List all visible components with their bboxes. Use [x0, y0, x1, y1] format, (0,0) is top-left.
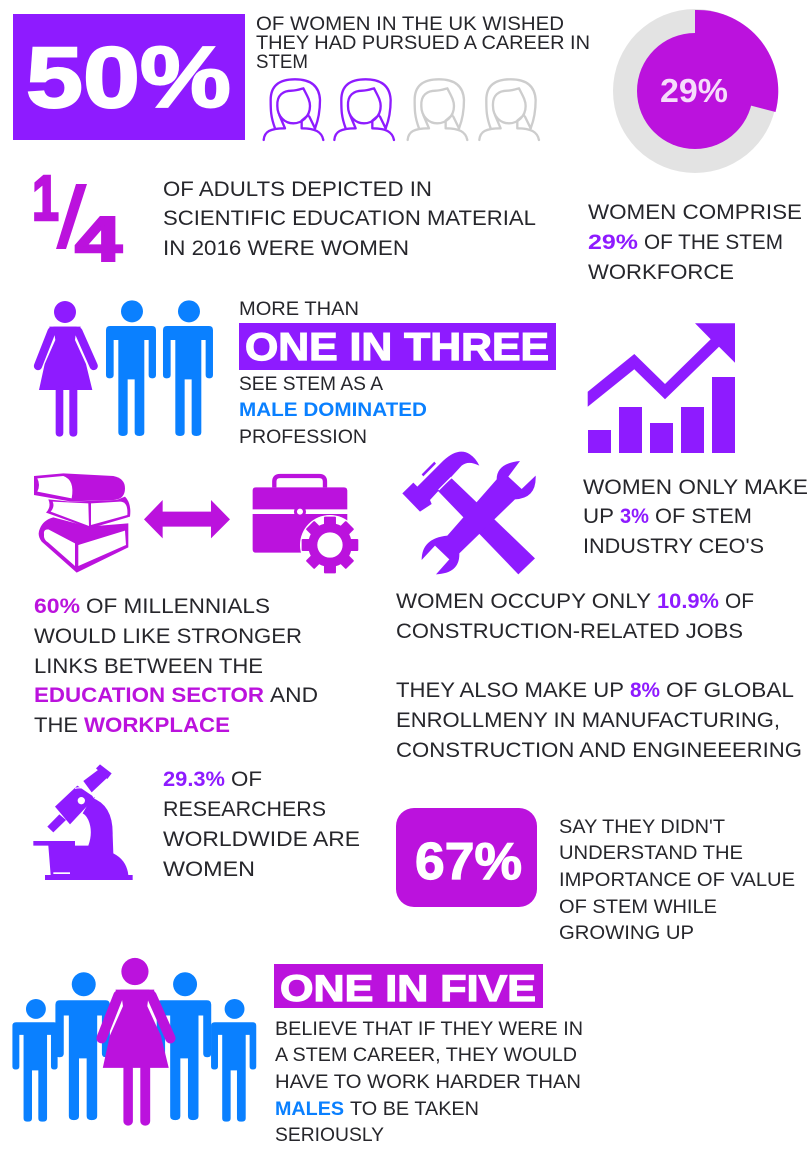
text: CEOs	[583, 476, 808, 558]
fraction: one quarter: 4	[75, 205, 122, 275]
header text: women who wished for STEM career: STEM	[256, 52, 308, 73]
fraction: one quarter: 1	[32, 162, 59, 234]
text: one in five: BELIEVE THAT IF THEY WERE IN	[275, 1019, 583, 1040]
text: did not understand value of STEM	[559, 817, 795, 944]
text: researchers	[163, 768, 360, 881]
text: one in three	[239, 299, 556, 448]
text: one in five: HAVE TO WORK HARDER THAN	[275, 1072, 581, 1093]
text: did not understand value of STEM: GROWING UP	[559, 923, 694, 944]
text: one in three: MORE THAN	[239, 299, 359, 320]
text: construction jobs: OF	[725, 590, 754, 613]
header stat: 50 percent box: 50%	[26, 30, 231, 126]
text: did not understand value of STEM: IMPORTANCE OF VALUE	[559, 870, 795, 891]
header text: women who wished for STEM career: THEY HAD PURSUED A CAREER IN	[256, 33, 590, 54]
text: researchers: RESEARCHERS	[163, 798, 326, 821]
text: millennials: 60%	[34, 595, 80, 618]
text: did not understand value of STEM: OF STEM WHILE	[559, 897, 717, 918]
text: one in five	[274, 964, 583, 1146]
text: millennials: LINKS BETWEEN THE	[34, 655, 263, 678]
text: women comprise 29 percent: WORKFORCE	[588, 261, 734, 284]
text: adults in scientific education material: OF ADULTS DEPICTED IN	[163, 178, 432, 201]
text: one in five: A STEM CAREER, THEY WOULD	[275, 1045, 577, 1066]
text: adults in scientific education material	[163, 178, 536, 260]
icon: microscope	[33, 764, 133, 880]
icon row: four women outlines	[264, 79, 539, 140]
header text: women who wished for STEM career	[256, 14, 590, 73]
text: one in five: SERIOUSLY	[275, 1125, 384, 1146]
text: global enrollment	[396, 679, 802, 762]
arrow: double headed	[144, 500, 230, 538]
text: CEOs: INDUSTRY CEO'S	[583, 535, 764, 558]
icon: hammer and wrench	[402, 452, 536, 574]
text: researchers: WOMEN	[163, 858, 255, 881]
text: one in five: MALES	[275, 1099, 344, 1120]
fraction: one quarter	[32, 162, 122, 275]
text: global enrollment: THEY ALSO MAKE UP	[396, 679, 624, 702]
text: researchers: WORLDWIDE ARE	[163, 828, 360, 851]
stat box: 67 percent	[396, 808, 537, 907]
text: women comprise 29 percent: 29%	[588, 231, 638, 254]
text: women comprise 29 percent: WOMEN COMPRISE	[588, 201, 802, 224]
text: adults in scientific education material: SCIENTIFIC EDUCATION MATERIAL	[163, 207, 536, 230]
text: global enrollment: 8%	[630, 679, 660, 702]
text: adults in scientific education material: IN 2016 WERE WOMEN	[163, 237, 409, 260]
text: one in five: ONE IN FIVE	[280, 968, 536, 1009]
stat box: 67 percent: 67%	[415, 833, 522, 891]
header stat: 50 percent box	[13, 14, 245, 140]
text: global enrollment: CONSTRUCTION AND ENGINEEERING	[396, 739, 802, 762]
icon: woman among four men	[12, 958, 256, 1126]
text: researchers: OF	[231, 768, 262, 791]
text: millennials	[34, 595, 318, 737]
text: global enrollment: ENROLLMENY IN MANUFACTURING,	[396, 709, 780, 732]
icon: one woman and two men	[38, 300, 213, 437]
text: millennials: WORKPLACE	[84, 714, 230, 737]
text: millennials: EDUCATION SECTOR	[34, 684, 264, 707]
icon: briefcase with gear	[253, 476, 360, 575]
text: millennials: OF MILLENNIALS	[86, 595, 270, 618]
text: one in three: ONE IN THREE	[245, 326, 549, 369]
text: researchers: 29.3%	[163, 768, 225, 791]
text: millennials: WOULD LIKE STRONGER	[34, 625, 302, 648]
text: one in five: TO BE TAKEN	[350, 1099, 479, 1120]
text: construction jobs: 10.9%	[657, 590, 719, 613]
text: construction jobs: CONSTRUCTION-RELATED JOBS	[396, 620, 743, 643]
text: did not understand value of STEM: SAY THEY DIDN'T	[559, 817, 725, 838]
text: CEOs: 3%	[620, 505, 649, 528]
text: CEOs: UP	[583, 505, 614, 528]
icon: stack of books	[34, 473, 130, 573]
text: CEOs: OF STEM	[655, 505, 752, 528]
icon: growth bar chart with arrow	[588, 323, 735, 453]
text: construction jobs: WOMEN OCCUPY ONLY	[396, 590, 651, 613]
text: millennials: AND	[270, 684, 318, 707]
text: CEOs: WOMEN ONLY MAKE	[583, 476, 808, 499]
text: millennials: THE	[34, 714, 78, 737]
donut chart: 29 percent: 29%	[660, 72, 728, 109]
text: women comprise 29 percent: OF THE STEM	[644, 231, 783, 254]
text: global enrollment: OF GLOBAL	[666, 679, 794, 702]
donut chart: 29 percent	[613, 9, 778, 173]
text: one in three: PROFESSION	[239, 427, 367, 448]
header text: women who wished for STEM career: OF WOMEN IN THE UK WISHED	[256, 14, 564, 35]
text: construction jobs	[396, 590, 754, 643]
text: one in three: MALE DOMINATED	[239, 400, 427, 421]
text: one in three: SEE STEM AS A	[239, 374, 383, 395]
text: did not understand value of STEM: UNDERSTAND THE	[559, 843, 743, 864]
text: women comprise 29 percent	[588, 201, 802, 284]
